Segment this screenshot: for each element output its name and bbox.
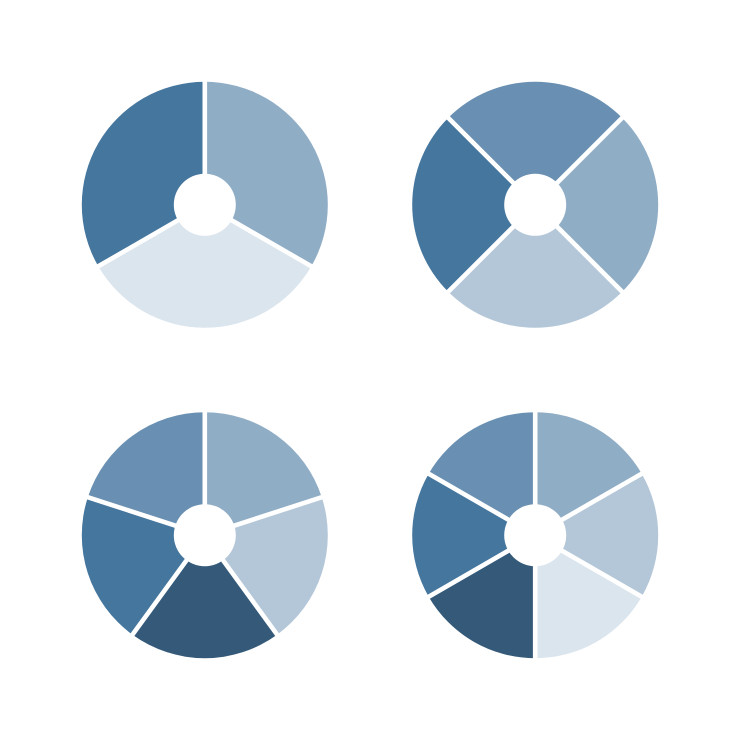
segment: top left <box>88 412 205 535</box>
segment: right <box>205 82 328 266</box>
segment: right <box>535 118 658 292</box>
segment: bottom <box>448 205 622 328</box>
segment: top right <box>205 412 322 535</box>
segment: bottom <box>132 535 277 658</box>
donut chart: five segments <box>82 409 328 658</box>
segment: bottom <box>98 205 311 328</box>
segment: left <box>412 474 535 597</box>
segment: lower right <box>205 497 328 635</box>
segment: lower left <box>82 497 205 635</box>
segment: left <box>412 118 535 292</box>
segment: bottom left <box>429 535 535 658</box>
segment: left <box>82 82 205 266</box>
segment: right <box>535 474 658 597</box>
segment: top <box>448 82 622 205</box>
donut chart: three segments <box>82 79 328 328</box>
segment: top right <box>535 412 642 535</box>
segment: top left <box>429 412 535 535</box>
segment: bottom right <box>535 535 642 658</box>
donut chart: six segments <box>412 409 658 661</box>
donut chart: four segments <box>412 82 658 328</box>
